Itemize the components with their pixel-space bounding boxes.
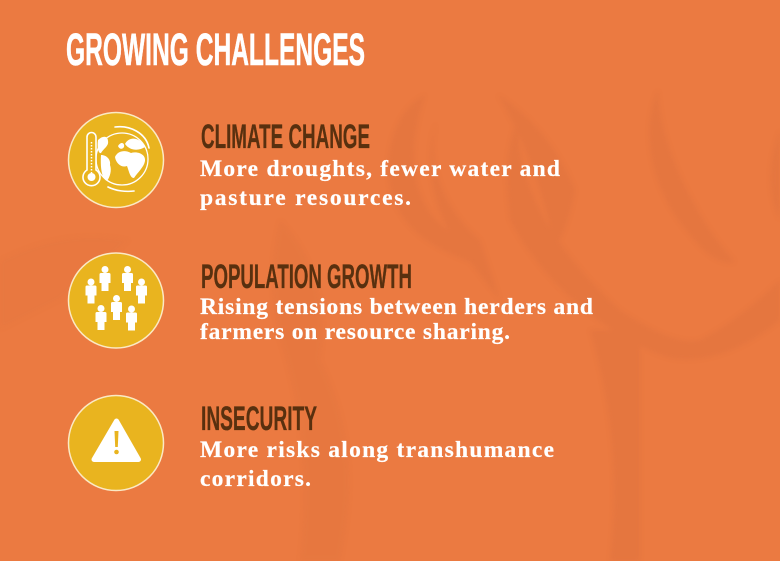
panel: insecurity (68, 396, 554, 492)
icon: warning triangle (68, 396, 164, 490)
panel: population growth (68, 253, 593, 348)
text: climate change description (200, 156, 560, 211)
heading: climate change: CLIMATE CHANGE (201, 118, 370, 156)
panel: climate change (68, 112, 560, 211)
heading: population growth: POPULATION GROWTH (201, 258, 412, 296)
text: insecurity description (200, 437, 554, 492)
icon: globe and thermometer (68, 112, 164, 208)
title: GROWING CHALLENGES (66, 24, 365, 75)
text: climate change description: pasture resources. (200, 185, 411, 211)
text: insecurity description: More risks along transhumance (200, 437, 554, 463)
text: population growth description: Rising tensions between herders and (200, 294, 593, 320)
text: population growth description: farmers on resource sharing. (200, 319, 510, 345)
text: population growth description (200, 294, 593, 345)
text: insecurity description: corridors. (200, 466, 311, 492)
icon: group of people (68, 253, 164, 348)
text: climate change description: More droughts, fewer water and (200, 156, 560, 182)
heading: insecurity: INSECURITY (201, 400, 317, 438)
